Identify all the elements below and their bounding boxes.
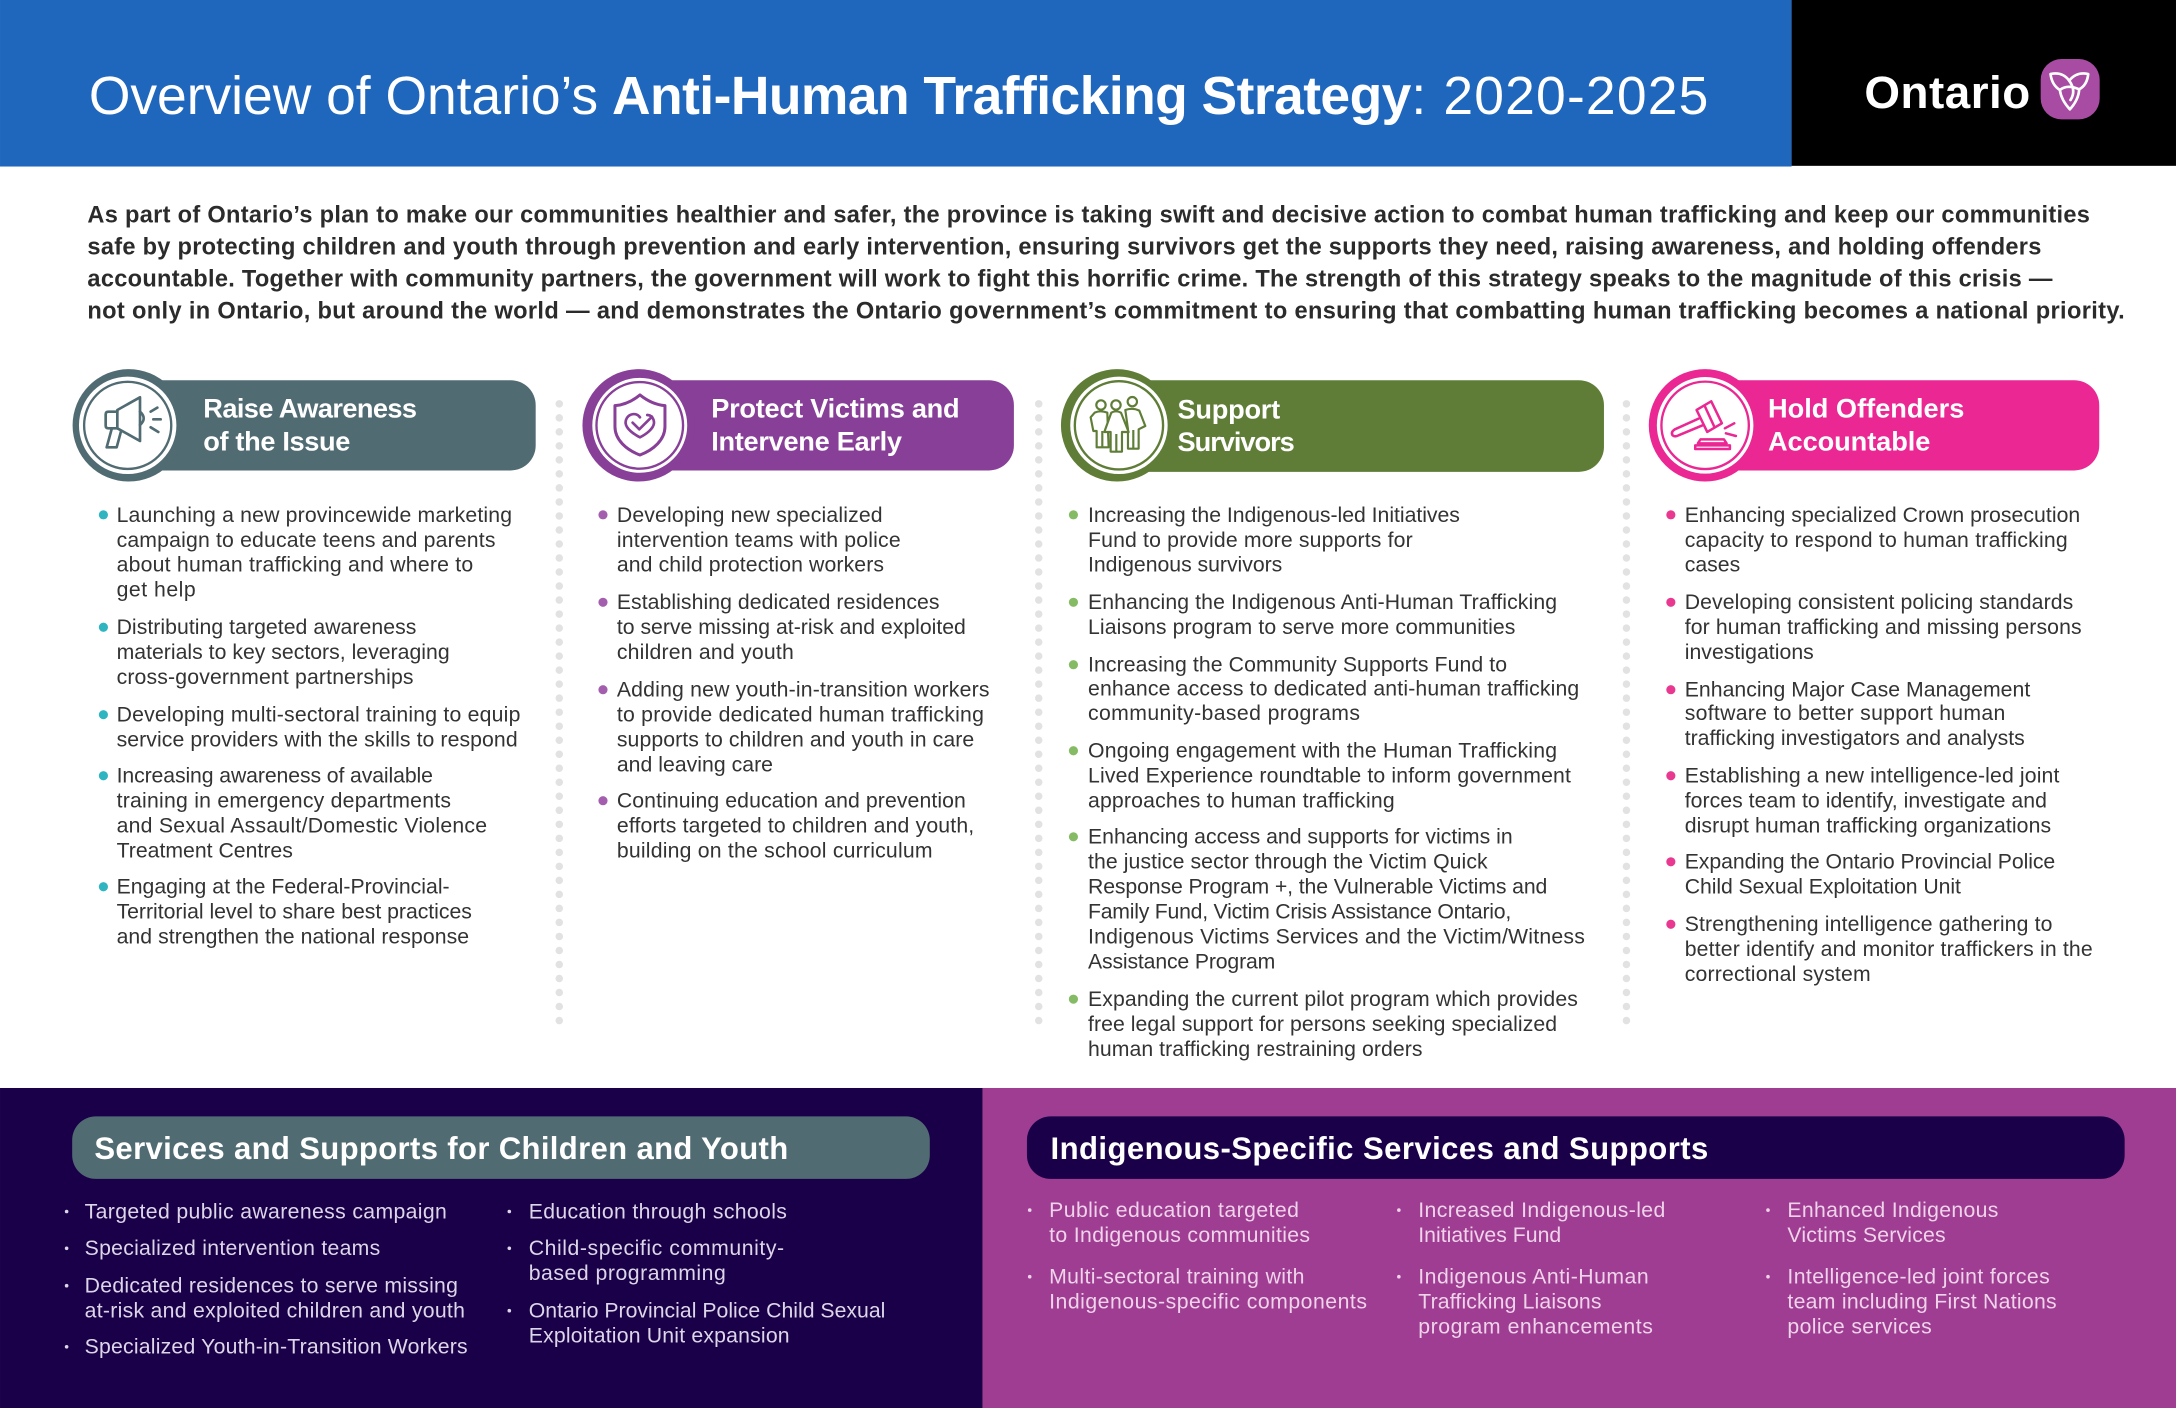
bullets: hold offenders: software to better support human: [1685, 702, 2005, 725]
panel: support survivors: [1061, 369, 1604, 1061]
bullets: protect victims: intervention teams with police: [617, 529, 901, 552]
heading: services for children and youth: [72, 1116, 930, 1179]
bullets: protect victims: supports to children and youth in care: [617, 729, 974, 752]
bullets: hold offenders: Enhancing specialized Crown prosecution: [1685, 504, 2080, 527]
list: indigenous-specific services: Intelligence-led joint forces: [1787, 1266, 2050, 1289]
list: services for children and youth: Child-specific community-: [529, 1237, 784, 1260]
bullets: protect victims: to serve missing at-risk and exploited: [617, 616, 966, 639]
bullets: protect victims: Adding new youth-in-transition workers: [617, 679, 989, 702]
bullets: hold offenders: forces team to identify, investigate and: [1685, 790, 2047, 813]
bullets: support survivors: community-based programs: [1088, 702, 1360, 725]
bullets: hold offenders: Establishing a new intelligence-led joint: [1685, 765, 2060, 788]
bullets: raise awareness: Launching a new provincewide marketing: [117, 504, 512, 527]
bullets: support survivors: Increasing the Community Supports Fund to: [1088, 654, 1507, 677]
heading: protect victims: Intervene Early: [711, 425, 902, 456]
list: indigenous-specific services: [1028, 1199, 2057, 1339]
heading: hold offenders: Hold Offenders: [1768, 393, 1964, 424]
bullets: raise awareness: training in emergency departments: [117, 790, 451, 813]
panel: raise awareness: [73, 369, 536, 949]
icon: megaphone: [73, 369, 185, 482]
bullets: raise awareness: and strengthen the national response: [117, 926, 469, 949]
heading: hold offenders: [1701, 380, 2099, 470]
bullets: hold offenders: Child Sexual Exploitation Unit: [1685, 876, 1961, 899]
bullets: support survivors: Indigenous survivors: [1088, 554, 1282, 577]
title: Overview of Ontario’s: [89, 67, 598, 126]
bullets: raise awareness: Distributing targeted awareness: [117, 616, 416, 639]
title: : 2020-2025: [1411, 67, 1708, 126]
bullets: hold offenders: for human trafficking and missing persons: [1685, 616, 2082, 639]
heading: services for children and youth: Services and Supports for Children and Youth: [94, 1131, 788, 1166]
bullets: support survivors: Enhancing the Indigenous Anti-Human Trafficking: [1088, 591, 1557, 614]
intro paragraph: not only in Ontario, but around the world — and demonstrates the Ontario government’s commitment to ensuring that combatting human trafficking becomes a national priority.: [87, 297, 2125, 323]
heading: protect victims: Protect Victims and: [711, 393, 960, 424]
heading: indigenous-specific services: Indigenous-Specific Services and Supports: [1051, 1131, 1708, 1166]
bullets: raise awareness: Treatment Centres: [117, 840, 293, 863]
bullets: protect victims: Continuing education and prevention: [617, 790, 966, 813]
heading: raise awareness: [125, 380, 536, 470]
heading: support survivors: [1114, 380, 1604, 472]
list: services for children and youth: Specialized Youth-in-Transition Workers: [85, 1336, 468, 1359]
bullets: support survivors: Lived Experience roundtable to inform government: [1088, 765, 1571, 788]
bullets: support survivors: Enhancing access and supports for victims in: [1088, 826, 1513, 849]
bullets: protect victims: Establishing dedicated residences: [617, 591, 940, 614]
bullets: hold offenders: investigations: [1685, 641, 1814, 664]
bullets: raise awareness: materials to key sectors, leveraging: [117, 641, 450, 664]
bullets: hold offenders: Developing consistent policing standards: [1685, 591, 2073, 614]
list: indigenous-specific services: program enhancements: [1418, 1316, 1653, 1339]
bullets: hold offenders: Enhancing Major Case Management: [1685, 679, 2030, 702]
bullets: support survivors: human trafficking restraining orders: [1088, 1038, 1422, 1061]
bullets: support survivors: Indigenous Victims Services and the Victim/Witness: [1088, 926, 1585, 949]
list: services for children and youth: Ontario Provincial Police Child Sexual: [529, 1300, 885, 1323]
list: indigenous-specific services: Multi-sectoral training with: [1049, 1266, 1304, 1289]
dotted column dividers: [559, 404, 1626, 1027]
bullets: protect victims: building on the school curriculum: [617, 840, 933, 863]
bullets: protect victims: Developing new specialized: [617, 504, 883, 527]
bullets: raise awareness: about human trafficking and where to: [117, 554, 473, 577]
Ontario logo: Ontario: [1864, 67, 2030, 118]
list: indigenous-specific services: police services: [1787, 1316, 1932, 1339]
header band: [0, 0, 2176, 167]
bullets: hold offenders: disrupt human trafficking organizations: [1685, 815, 2051, 838]
list: indigenous-specific services: Increased Indigenous-led: [1418, 1199, 1665, 1222]
bullets: support survivors: Family Fund, Victim Crisis Assistance Ontario,: [1088, 901, 1511, 924]
heading: hold offenders: Accountable: [1768, 425, 1930, 456]
list: services for children and youth: at-risk and exploited children and youth: [85, 1300, 465, 1323]
bullets: protect victims: children and youth: [617, 641, 794, 664]
bullets: raise awareness: and Sexual Assault/Domestic Violence: [117, 815, 487, 838]
title: Anti-Human Trafficking Strategy: [612, 67, 1412, 126]
list: indigenous-specific services: Victims Services: [1787, 1224, 1946, 1247]
bullets: support survivors: Increasing the Indigenous-led Initiatives: [1088, 504, 1460, 527]
bullets: protect victims: and child protection workers: [617, 554, 884, 577]
bullets: support survivors: the justice sector through the Victim Quick: [1088, 851, 1488, 874]
heading: support survivors: Support: [1178, 393, 1280, 424]
bullets: raise awareness: service providers with the skills to respond: [117, 729, 518, 752]
bullets: support survivors: approaches to human trafficking: [1088, 790, 1395, 813]
icon: gavel: [1649, 369, 1761, 482]
bullets: support survivors: Assistance Program: [1088, 951, 1275, 974]
bullets: protect victims: to provide dedicated human trafficking: [617, 704, 984, 727]
list: indigenous-specific services: Indigenous Anti-Human: [1418, 1266, 1649, 1289]
bullets: hold offenders: cases: [1685, 554, 1740, 577]
panel: indigenous-specific services: [983, 1088, 2176, 1408]
bullets: support survivors: [1069, 504, 1585, 1061]
bullets: support survivors: Fund to provide more supports for: [1088, 529, 1413, 552]
bullets: support survivors: Liaisons program to serve more communities: [1088, 616, 1515, 639]
icon: shield: [582, 369, 695, 482]
heading: support survivors: Survivors: [1178, 426, 1295, 457]
heading: raise awareness: Raise Awareness: [203, 393, 417, 424]
panel: protect victims: [582, 369, 1014, 863]
bullets: raise awareness: Increasing awareness of available: [117, 765, 433, 788]
bullets: raise awareness: Engaging at the Federal-Provincial-: [117, 876, 450, 899]
bullets: raise awareness: [99, 504, 520, 949]
bullets: raise awareness: Developing multi-sectoral training to equip: [117, 704, 520, 727]
panel: hold offenders accountable: [1649, 369, 2099, 986]
bullets: support survivors: Expanding the current pilot program which provides: [1088, 988, 1578, 1011]
Ontario logo: [1864, 59, 2100, 119]
list: services for children and youth: Targeted public awareness campaign: [85, 1200, 447, 1223]
bullets: hold offenders: [1666, 504, 2093, 986]
heading: protect victims: [636, 380, 1014, 470]
bullets: raise awareness: Territorial level to share best practices: [117, 901, 472, 924]
title: [89, 67, 1708, 126]
intro paragraph: As part of Ontario’s plan to make our communities healthier and safer, the province is taking swift and decisive action to combat human trafficking and keep our communities: [87, 202, 2090, 228]
bullets: support survivors: free legal support for persons seeking specialized: [1088, 1013, 1557, 1036]
bullets: hold offenders: Strengthening intelligence gathering to: [1685, 913, 2052, 936]
bullets: hold offenders: Expanding the Ontario Provincial Police: [1685, 851, 2055, 874]
bullets: raise awareness: get help: [117, 579, 196, 602]
bullets: support survivors: Response Program +, the Vulnerable Victims and: [1088, 876, 1547, 899]
list: services for children and youth: [65, 1200, 885, 1359]
list: indigenous-specific services: Enhanced Indigenous: [1787, 1199, 1998, 1222]
list: services for children and youth: Specialized intervention teams: [85, 1237, 380, 1260]
list: indigenous-specific services: Trafficking Liaisons: [1418, 1291, 1601, 1314]
list: indigenous-specific services: team including First Nations: [1787, 1291, 2057, 1314]
list: services for children and youth: Exploitation Unit expansion: [529, 1325, 790, 1348]
list: indigenous-specific services: Public education targeted: [1049, 1199, 1299, 1222]
intro paragraph: accountable. Together with community partners, the government will work to fight this horrific crime. The strength of this strategy speaks to the magnitude of this crisis —: [87, 266, 2053, 292]
bullets: hold offenders: correctional system: [1685, 963, 1871, 986]
bullets: hold offenders: trafficking investigators and analysts: [1685, 727, 2025, 750]
list: services for children and youth: Education through schools: [529, 1200, 787, 1223]
list: services for children and youth: based programming: [529, 1262, 726, 1285]
icon: three people: [1061, 369, 1173, 482]
bullets: support survivors: Ongoing engagement with the Human Trafficking: [1088, 740, 1557, 763]
bullets: raise awareness: campaign to educate teens and parents: [117, 529, 495, 552]
bullets: hold offenders: better identify and monitor traffickers in the: [1685, 938, 2093, 961]
bullets: hold offenders: capacity to respond to human trafficking: [1685, 529, 2068, 552]
bullets: raise awareness: cross-government partnerships: [117, 666, 414, 689]
heading: raise awareness: of the Issue: [203, 425, 350, 456]
list: indigenous-specific services: Indigenous-specific components: [1049, 1291, 1367, 1314]
heading: indigenous-specific services: [1027, 1116, 2125, 1179]
list: indigenous-specific services: to Indigenous communities: [1049, 1224, 1310, 1247]
intro paragraph: [87, 202, 2125, 323]
intro paragraph: safe by protecting children and youth through prevention and early intervention, ensuring survivors get the supports they need, raising awareness, and holding offenders: [87, 234, 2041, 260]
bullets: protect victims: [598, 504, 989, 863]
list: indigenous-specific services: Initiatives Fund: [1418, 1224, 1561, 1247]
panel: services for children and youth: [0, 1088, 983, 1408]
bullets: protect victims: efforts targeted to children and youth,: [617, 815, 974, 838]
bullets: protect victims: and leaving care: [617, 754, 773, 777]
bullets: support survivors: enhance access to dedicated anti-human trafficking: [1088, 677, 1579, 700]
list: services for children and youth: Dedicated residences to serve missing: [85, 1275, 458, 1298]
